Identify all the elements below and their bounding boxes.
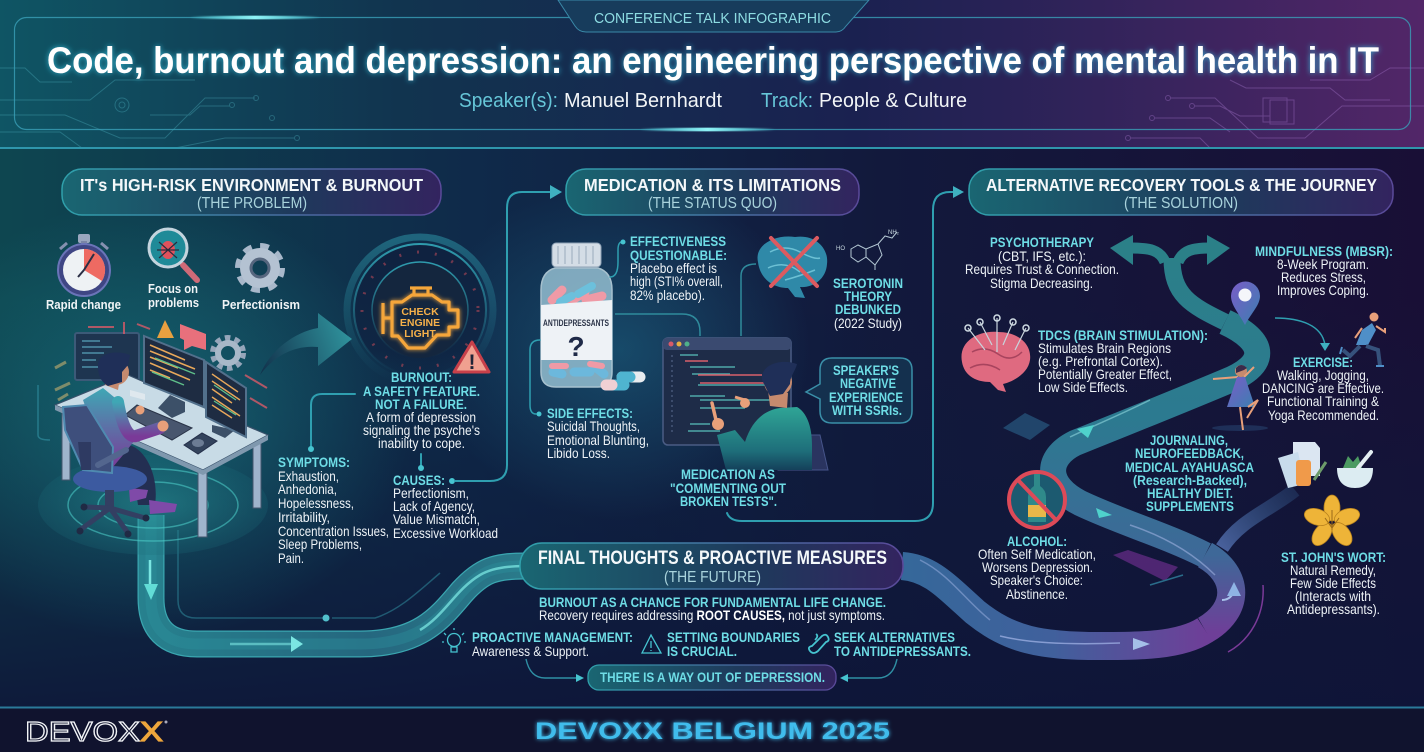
arrow: medication to alternatives [727,186,964,521]
callout: speaker's experience: SPEAKER'S [833,363,899,379]
DEVOXX logo: X [140,716,163,747]
effectiveness text: Placebo effect is [630,261,717,276]
callout: speaker's experience: WITH SSRIs. [832,403,902,419]
setting boundaries text [667,630,800,660]
icon: St. John's wort flower [1302,495,1362,549]
seek alternatives text: SEEK ALTERNATIVES [834,630,955,646]
section heading: the problem [62,169,441,215]
illustration: developer at desk [38,320,268,555]
psychotherapy text: PSYCHOTHERAPY [990,235,1094,251]
exercise text: EXERCISE: [1293,355,1353,371]
tDCS text: TDCS (BRAIN STIMULATION): [1038,328,1208,344]
tDCS text: Potentially Greater Effect, [1038,367,1172,382]
symptoms text: SYMPTOMS: [278,455,350,471]
icon: journal, juice and herbs [1278,442,1373,488]
psychotherapy text: (CBT, IFS, etc.): [998,249,1086,264]
St. John's wort text: Natural Remedy, [1290,563,1376,578]
DEVOXX logo: DEVOX [25,716,140,747]
exercise text: Functional Training & [1267,394,1379,409]
legs, seat and base [73,444,177,538]
final thoughts text [539,595,886,623]
alcohol text: Abstinence. [1006,587,1068,602]
speaker and track: Manuel Bernhardt [564,90,722,112]
serotonin text: THEORY [844,289,892,305]
section heading: the status quo: MEDICATION & ITS LIMITATIONS [584,175,841,195]
medication metaphor text: BROKEN TESTS". [680,494,777,510]
labels: problem factors: problems [148,295,199,310]
section heading: the future: FINAL THOUGHTS & PROACTIVE MEASURES [538,548,887,569]
exercise text: Yoga Recommended. [1268,408,1379,423]
journaling and supplements text: MEDICAL AYAHUASCA [1125,460,1254,476]
medication metaphor text: "COMMENTING OUT [670,481,786,497]
section heading: the future: (THE FUTURE) [664,569,761,586]
title: Code, burnout and depression: an engineering perspective of mental health in IT [47,40,1379,81]
section heading: the solution: (THE SOLUTION) [1124,195,1238,212]
callout: speaker's experience: EXPERIENCE [829,390,903,406]
section heading: the future [520,543,903,589]
causes text: Perfectionism, [393,486,469,501]
desk [55,375,268,537]
icon: gear [240,248,280,288]
icon: map pin [1231,282,1260,325]
final thoughts text: BURNOUT AS A CHANCE FOR FUNDAMENTAL LIFE CHANGE. [539,595,886,611]
icon: dancer [1212,365,1268,431]
serotonin text: (2022 Study) [834,316,902,331]
callout: speaker's experience [806,358,912,423]
symptoms text [278,455,389,566]
symptoms text: Exhaustion, [278,469,339,484]
burnout text: A form of depression [366,410,476,425]
tDCS text: Low Side Effects. [1038,380,1128,395]
psychotherapy text: Requires Trust & Connection. [965,262,1119,277]
seek alternatives text [834,630,971,660]
arrow: to exercise [1275,318,1330,351]
icon: pink brain with electrodes [961,315,1030,392]
symptoms text: Concentration Issues, [278,524,389,539]
medication metaphor text [670,467,786,510]
exercise text: Walking, Jogging, [1277,368,1369,383]
effectiveness text: 82% placebo). [630,288,705,303]
causes text: Value Mismatch, [393,512,480,527]
icon: chain link [809,634,829,653]
speaker and track: Track: [761,90,813,112]
callout: way out of depression [588,665,836,690]
speaker and track: Speaker(s): [459,90,558,112]
left monitor [75,333,139,380]
alcohol text: Often Self Medication, [978,547,1096,562]
alcohol text: Worsens Depression. [982,560,1093,575]
psychotherapy text [965,235,1119,291]
St. John's wort text: Antidepressants). [1287,602,1380,617]
icon: check engine light: ENGINE [400,317,440,329]
right monitor [206,362,246,438]
psychotherapy text: Stigma Decreasing. [990,276,1093,291]
illustration: code screen with developer [663,338,828,470]
speaker and track [459,90,967,112]
symptoms text: Pain. [278,551,304,566]
side effects text: Emotional Blunting, [547,433,649,448]
illustration: crossed brain and serotonin molecule: HO [836,246,845,252]
icon: no alcohol [1009,472,1065,528]
speaker and track: People & Culture [819,90,967,112]
serotonin text: SEROTONIN [833,276,903,292]
section heading: the status quo: (THE STATUS QUO) [648,195,777,212]
labels: problem factors: Perfectionism [222,297,300,312]
icon: light bulb [442,628,466,652]
illustration: antidepressants bottle: ANTIDEPRESSANTS [543,318,609,328]
causes text: Excessive Workload [393,526,498,541]
journaling and supplements text: HEALTHY DIET. [1147,486,1233,502]
journaling and supplements text: (Research-Backed), [1133,473,1247,489]
tDCS text: (e.g. Prefrontal Cortex). [1038,354,1163,369]
symptoms text: Irritability, [278,510,330,525]
exercise text [1262,355,1384,423]
journey road: left section [144,515,525,652]
mindfulness text [1255,244,1393,298]
section heading: the problem: (THE PROBLEM) [197,195,307,212]
St. John's wort text [1281,550,1386,617]
effectiveness text: high (STI% overall, [630,274,723,289]
symptoms text: Hopelessness, [278,496,354,511]
floating warning, chat and gear [38,320,267,440]
exercise text: DANCING are Effective. [1262,381,1384,396]
alcohol text: ALCOHOL: [1007,534,1067,550]
side effects text: Libido Loss. [547,446,610,461]
proactive management text [472,630,633,659]
symptoms text: Anhedonia, [278,482,337,497]
arrow: desk to check engine light [260,313,352,375]
burnout text: A SAFETY FEATURE. [363,384,480,400]
icon: check engine light: ! [468,351,476,374]
section heading: the problem: IT's HIGH-RISK ENVIRONMENT & BURNOUT [80,175,423,195]
icon: check engine light: LIGHT [404,328,436,340]
mindfulness text: MINDFULNESS (MBSR): [1255,244,1393,260]
causes text: Lack of Agency, [393,499,475,514]
section heading: the status quo [566,169,859,215]
keyboard and mouse [125,390,217,454]
footer band [0,706,1424,752]
proactive management text: PROACTIVE MANAGEMENT: [472,630,633,646]
callout: speaker's experience: NEGATIVE [840,376,896,392]
header band [0,0,1424,149]
burnout text: inability to cope. [378,436,465,451]
final thoughts text: Recovery requires addressing ROOT CAUSES, not just symptoms. [539,608,885,623]
tDCS text [1038,328,1208,395]
effectiveness text: EFFECTIVENESS [630,234,726,250]
illustration: crossed brain and serotonin molecule [758,230,900,298]
setting boundaries text: IS CRUCIAL. [667,644,737,660]
icon: check engine light [347,237,493,383]
St. John's wort text: ST. JOHN'S WORT: [1281,550,1386,566]
effectiveness text [610,234,727,303]
symptoms text: Sleep Problems, [278,537,362,552]
medication metaphor text: MEDICATION AS [681,467,775,483]
burnout text: NOT A FAILURE. [375,397,467,413]
serotonin text [833,276,903,331]
arrows to callout [526,659,897,682]
icon: bug magnifier [149,229,197,280]
mindfulness text: 8-Week Program. [1277,257,1369,272]
causes text: CAUSES: [393,473,445,489]
side effects text: Suicidal Thoughts, [547,419,640,434]
labels: problem factors: Focus on [148,281,198,296]
burnout text: BURNOUT: [391,370,452,386]
section heading: the solution [969,169,1393,215]
arrow: causes to medication [449,185,562,484]
proactive management text: Awareness & Support. [472,644,589,659]
chair back and arm [63,405,126,473]
DEVOXX logo [25,716,168,747]
mindfulness text: Reduces Stress, [1281,270,1366,285]
connectors from burnout [308,394,424,471]
section heading: the solution: ALTERNATIVE RECOVERY TOOLS & THE JOURNEY [986,175,1377,195]
illustration: crossed brain and serotonin molecule: NH₂ [888,230,900,236]
journaling and supplements text: NEUROFEEDBACK, [1135,446,1244,462]
causes text [393,473,498,541]
icon: stopwatch [58,234,110,296]
centre monitor [144,336,204,418]
alcohol text [978,534,1096,602]
setting boundaries text: SETTING BOUNDARIES [667,630,800,646]
seek alternatives text: TO ANTIDEPRESSANTS. [834,644,971,660]
labels: problem factors [46,281,300,312]
footer event name: DEVOXX BELGIUM 2025 [535,718,890,745]
icon: check engine light: CHECK [401,306,439,318]
journaling and supplements text: SUPPLEMENTS [1146,499,1234,515]
journey road: S curve to the fork [902,248,1295,646]
St. John's wort text: (Interacts with [1295,589,1371,604]
header tab: CONFERENCE TALK INFOGRAPHIC [594,10,831,27]
serotonin text: DEBUNKED [835,302,901,318]
faint road decorations [178,413,1263,652]
icon: warning triangle [642,635,661,653]
illustration: antidepressants bottle: ? [567,331,585,362]
side effects text: SIDE EFFECTS: [547,406,633,422]
icon: runner [1340,312,1385,366]
connectors: bottle and brain to screen [615,264,756,336]
illustration: antidepressants bottle [541,243,640,387]
labels: problem factors: Rapid change [46,297,121,312]
St. John's wort text: Few Side Effects [1290,576,1376,591]
burnout text: signaling the psyche's [363,423,480,438]
callout: way out of depression: THERE IS A WAY OUT OF DEPRESSION. [600,670,825,686]
mindfulness text: Improves Coping. [1277,283,1369,298]
journaling and supplements text [1125,433,1254,515]
person [83,353,168,467]
burnout text [363,370,480,451]
side effects text [530,340,649,461]
journaling and supplements text: JOURNALING, [1150,433,1228,449]
header tab [558,0,869,32]
road arrowheads [1077,235,1241,650]
alcohol text: Speaker's Choice: [990,573,1083,588]
tDCS text: Stimulates Brain Regions [1038,341,1171,356]
effectiveness text: QUESTIONABLE: [630,248,727,264]
